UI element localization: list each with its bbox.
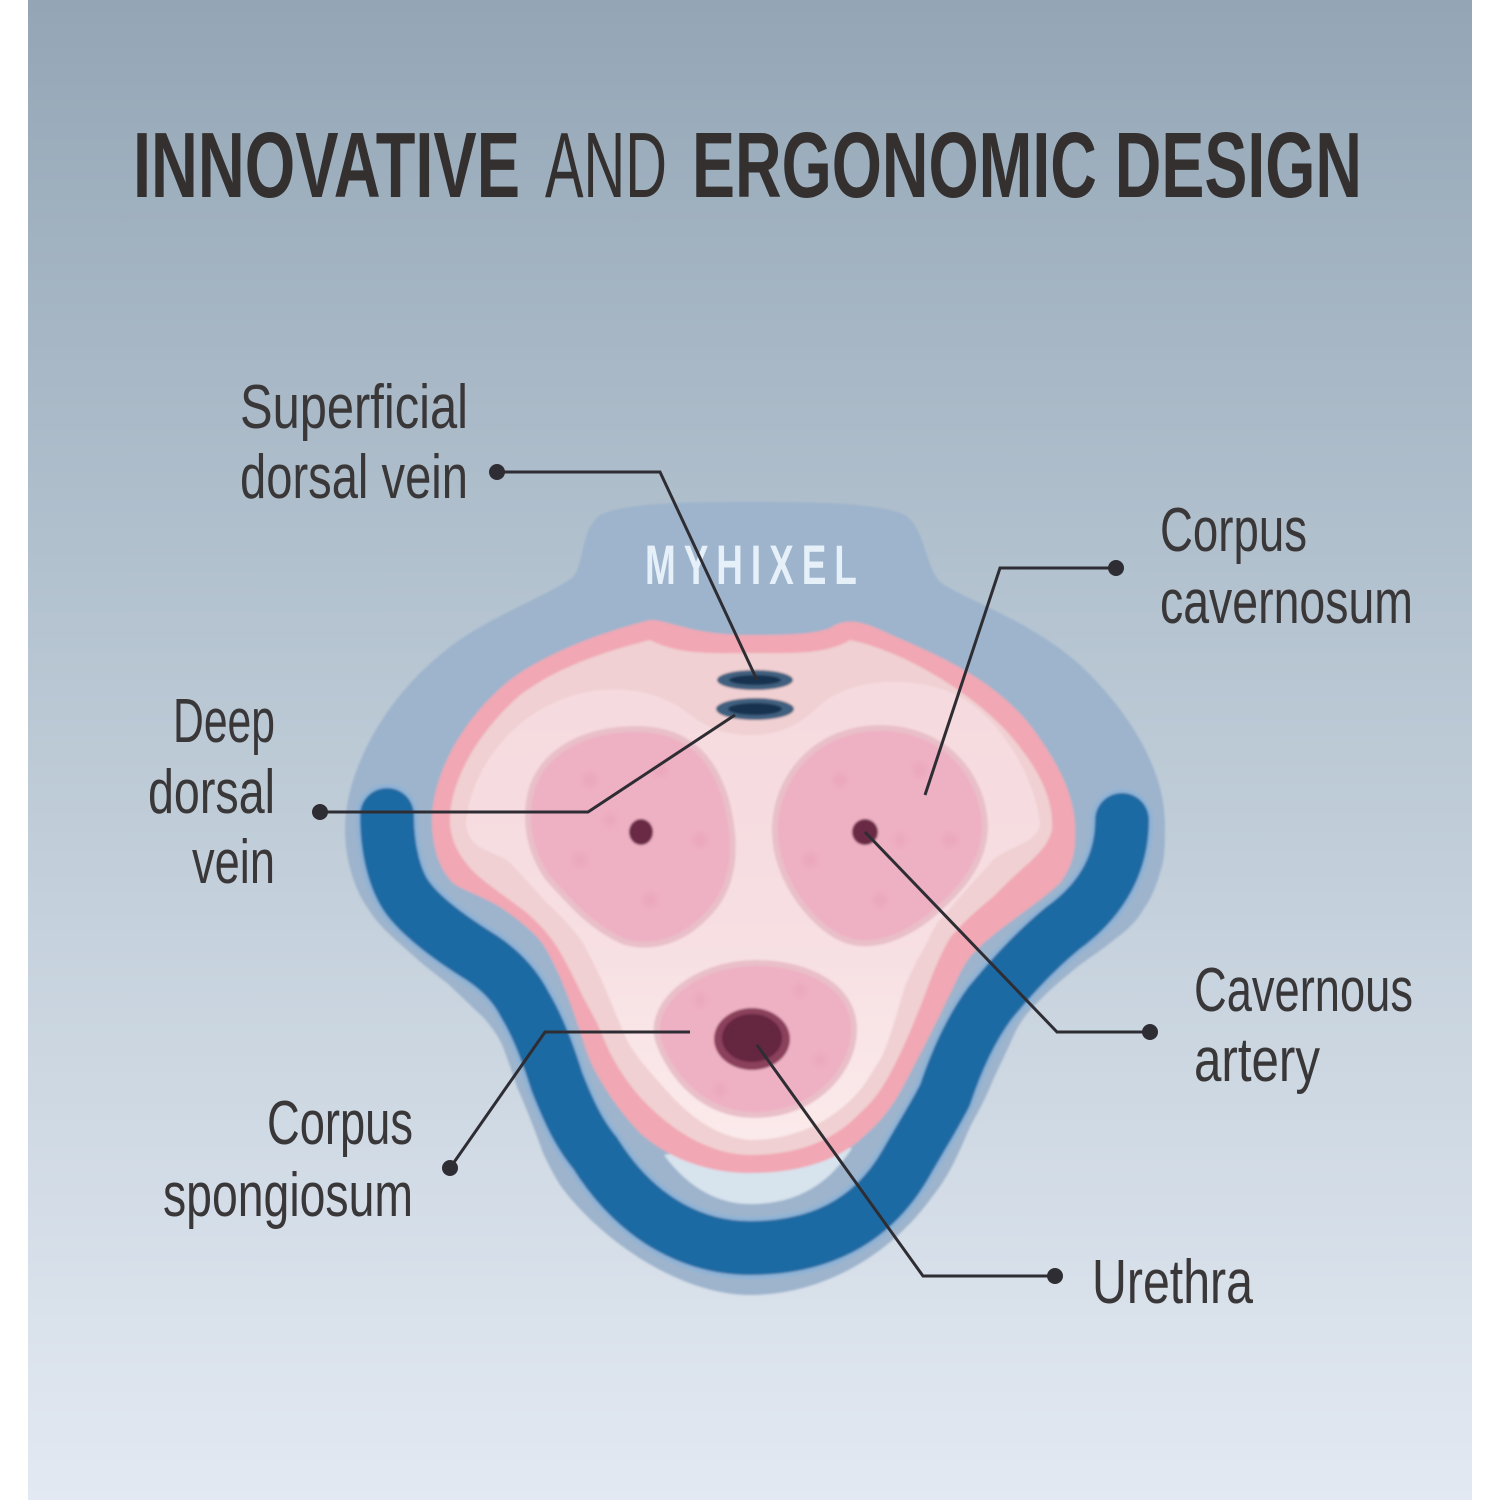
label: corpus spongiosum [163, 1089, 413, 1230]
label: deep dorsal vein: dorsal [148, 758, 275, 827]
corpus spongiosum [657, 963, 854, 1115]
leader: corpus spongiosum [450, 1032, 690, 1168]
leader: corpus cavernosum [925, 568, 1116, 795]
superficial dorsal vein [717, 670, 793, 690]
label: urethra: Urethra [1092, 1248, 1253, 1317]
title: AND [545, 113, 667, 217]
label: cavernous artery [1194, 956, 1413, 1095]
blue band [387, 815, 1122, 1248]
label: superficial dorsal vein: Superficial [240, 373, 468, 442]
device housing [345, 502, 1165, 1295]
label: corpus cavernosum: cavernosum [1160, 568, 1413, 637]
label: superficial dorsal vein: dorsal vein [240, 443, 468, 512]
brand label: MYHIXEL [645, 534, 857, 597]
label: corpus cavernosum: Corpus [1160, 496, 1307, 565]
leader end dots [312, 464, 1158, 1284]
tissue inner layer [466, 682, 1040, 1140]
tissue outer layer [432, 620, 1075, 1173]
leader: cavernous artery [865, 832, 1150, 1032]
spongy tissue texture [573, 763, 957, 1096]
label: superficial dorsal vein [240, 373, 468, 512]
urethra [714, 1008, 790, 1070]
title: INNOVATIVE [133, 113, 520, 217]
leader: urethra [757, 1045, 1055, 1276]
title [133, 113, 1362, 217]
label: cavernous artery: Cavernous [1194, 956, 1413, 1025]
label: corpus cavernosum [1160, 496, 1413, 637]
leader: superficial dorsal vein [497, 472, 757, 680]
cavernous arteries [629, 819, 878, 845]
tissue middle layer [450, 640, 1052, 1155]
device inner gap [664, 1140, 852, 1204]
label: deep dorsal vein: vein [192, 828, 275, 897]
right corpus cavernosum [775, 728, 985, 943]
leader lines [320, 472, 1150, 1276]
label: deep dorsal vein [148, 687, 275, 897]
label: cavernous artery: artery [1194, 1026, 1320, 1095]
leader: deep dorsal vein [320, 715, 735, 812]
deep dorsal vein [716, 698, 794, 720]
label: corpus spongiosum: spongiosum [163, 1161, 413, 1230]
label: deep dorsal vein: Deep [173, 687, 275, 756]
left corpus cavernosum [528, 729, 733, 945]
cross-section diagram [345, 502, 1165, 1295]
label: corpus spongiosum: Corpus [267, 1089, 413, 1158]
